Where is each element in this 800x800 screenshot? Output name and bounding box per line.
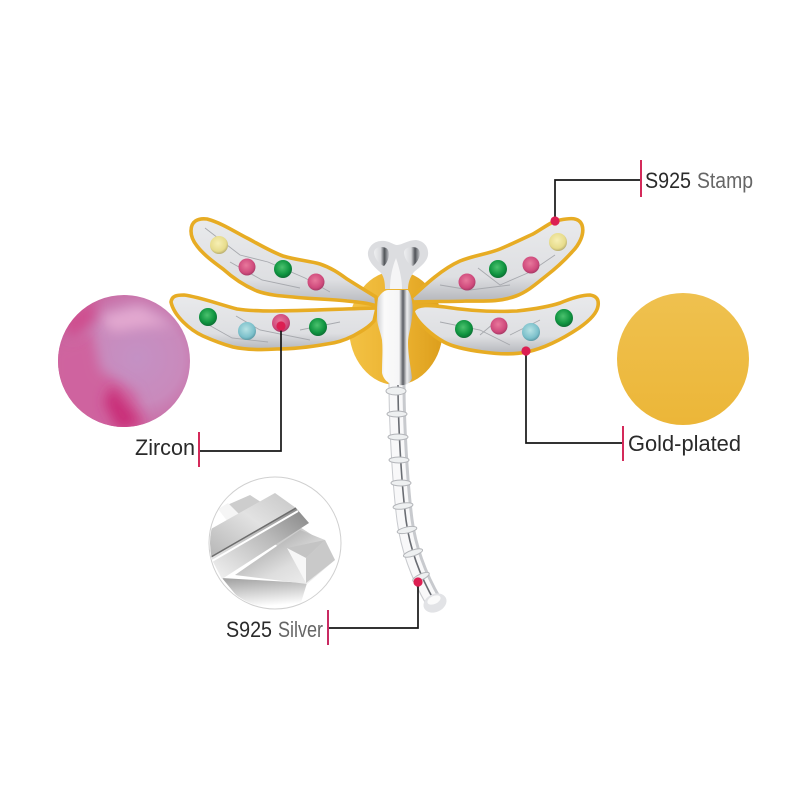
infographic canvas: [58, 160, 752, 645]
gems: upper left wing: [210, 236, 324, 290]
gems: lower right wing: [455, 309, 573, 341]
dragonfly brooch: [171, 219, 598, 616]
material swatch: silver bars: [209, 477, 341, 609]
callout: Gold-plated: Gold-plated: [628, 431, 741, 456]
lower right wing: [413, 295, 598, 354]
gems: upper right wing: [458, 233, 567, 290]
callout: Zircon: [135, 321, 286, 467]
gems: lower left wing: [199, 308, 327, 340]
callout: S925 Silver: [226, 577, 423, 645]
callout: S925 Silver: S925: [226, 617, 272, 642]
callout: S925 Stamp: S925: [645, 168, 691, 193]
callout: S925 Silver: Silver: [278, 617, 323, 642]
material swatch: gold plating: [617, 293, 749, 425]
upper left wing: [191, 219, 377, 306]
dragonfly thorax: [377, 290, 413, 385]
brooch backing disc: [349, 271, 443, 385]
lower left wing: [171, 295, 377, 350]
callout: Zircon: Zircon: [135, 435, 195, 460]
callout: S925 Stamp: Stamp: [697, 168, 753, 193]
upper right wing: [411, 219, 583, 302]
dragonfly head: [368, 240, 428, 289]
callout: Gold-plated: [521, 346, 741, 461]
material swatch: zircon gemstone: [58, 295, 190, 427]
callout: S925 Stamp: [550, 160, 753, 226]
dragonfly tail: [386, 383, 450, 616]
